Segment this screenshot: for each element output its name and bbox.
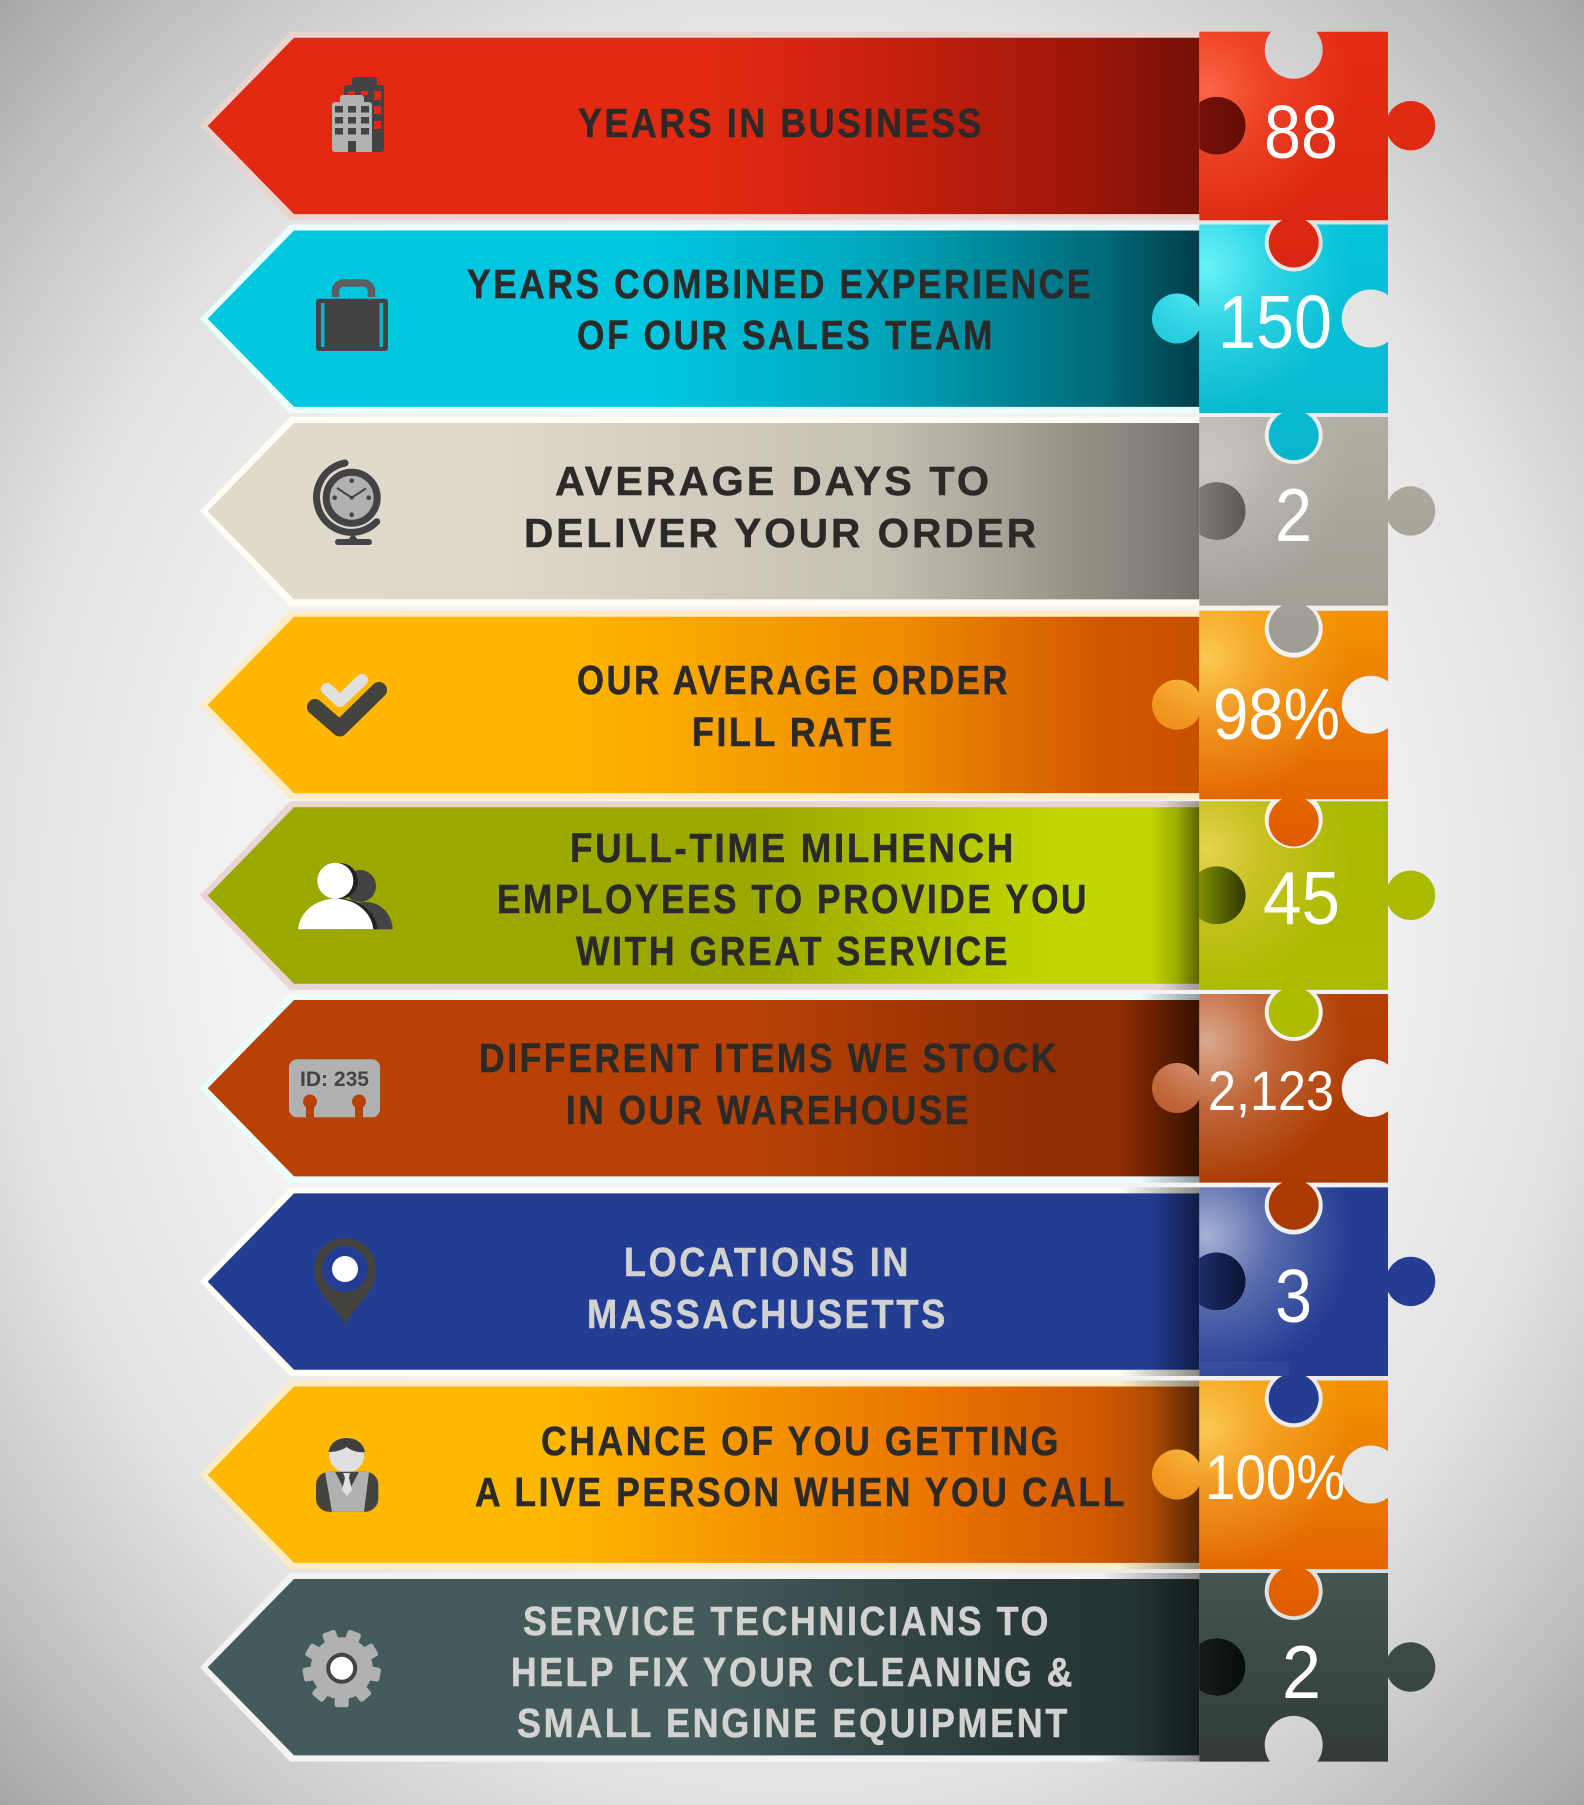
ribbon: rust — [200, 994, 1199, 1183]
label: AVERAGE DAYS TO — [555, 458, 992, 504]
panel: locations — [200, 1187, 1435, 1423]
puzzle piece: orange — [1152, 1380, 1388, 1616]
label: CHANCE OF YOU GETTING — [541, 1418, 1061, 1464]
label: OUR AVERAGE ORDER — [577, 657, 1010, 703]
icon: check marks — [315, 680, 379, 728]
puzzle piece: orange — [1152, 611, 1388, 846]
ribbon: amber — [200, 611, 1199, 799]
ribbon: slate — [200, 1573, 1199, 1762]
label — [587, 1239, 948, 1337]
puzzle piece: red — [1199, 32, 1435, 267]
number: 2 — [1282, 1630, 1321, 1714]
icon: office buildings — [332, 77, 384, 152]
label: YEARS COMBINED EXPERIENCE — [467, 261, 1093, 307]
panel: years in business — [200, 32, 1435, 267]
ribbon: cyan — [200, 224, 1199, 413]
icon: people — [298, 863, 393, 929]
label: FULL-TIME MILHENCH — [570, 825, 1016, 871]
icon: map pin — [314, 1238, 376, 1325]
panel: combined experience — [200, 224, 1388, 460]
icon: id tag: ID: 235 — [300, 1068, 369, 1091]
number: 2 — [1275, 473, 1312, 557]
puzzle piece: cyan — [1152, 224, 1388, 460]
label — [497, 825, 1089, 974]
puzzle piece: grey — [1199, 417, 1435, 653]
label: YEARS IN BUSINESS — [578, 100, 984, 146]
label: WITH GREAT SERVICE — [576, 928, 1010, 974]
number: 88 — [1264, 90, 1338, 174]
label — [475, 1418, 1127, 1515]
label — [467, 261, 1093, 358]
number: 100% — [1205, 1443, 1345, 1513]
ribbon: red — [200, 32, 1199, 220]
label: HELP FIX YOUR CLEANING & — [511, 1649, 1075, 1695]
puzzle piece: rust — [1152, 994, 1388, 1230]
label: DIFFERENT ITEMS WE STOCK — [479, 1035, 1059, 1081]
label: SERVICE TECHNICIANS TO — [523, 1598, 1051, 1644]
icon: globe clock — [317, 463, 377, 545]
label — [479, 1035, 1059, 1133]
icon: gear — [302, 1629, 381, 1707]
panel: full-time employees — [200, 801, 1435, 1037]
label: DELIVER YOUR ORDER — [524, 510, 1039, 556]
label: EMPLOYEES TO PROVIDE YOU — [497, 876, 1089, 922]
number: 98% — [1213, 675, 1340, 755]
label: LOCATIONS IN — [624, 1239, 911, 1285]
number: 150 — [1218, 280, 1332, 364]
label: SMALL ENGINE EQUIPMENT — [517, 1700, 1070, 1746]
ribbon: beige — [200, 417, 1199, 606]
icon: briefcase — [316, 283, 388, 351]
ribbon: olive — [200, 801, 1199, 990]
panel: order fill rate — [200, 611, 1388, 846]
label — [511, 1598, 1075, 1746]
number: 45 — [1263, 856, 1340, 940]
puzzle piece: green — [1199, 801, 1435, 1037]
label: OF OUR SALES TEAM — [577, 312, 995, 358]
label: FILL RATE — [692, 709, 895, 755]
panel: days to deliver — [200, 417, 1435, 653]
number: 2,123 — [1208, 1059, 1334, 1122]
label — [577, 657, 1010, 755]
ribbon: amber — [200, 1380, 1199, 1569]
icon: id tag — [289, 1059, 380, 1117]
ribbon: blue — [200, 1187, 1199, 1376]
panel: service technicians — [200, 1573, 1435, 1762]
puzzle piece: blue — [1199, 1187, 1435, 1423]
number: 3 — [1275, 1254, 1312, 1338]
panel: items in stock — [200, 994, 1388, 1230]
panel: live person — [200, 1380, 1388, 1616]
label: MASSACHUSETTS — [587, 1291, 948, 1337]
icon: person in suit — [316, 1438, 378, 1512]
label: IN OUR WAREHOUSE — [566, 1087, 971, 1133]
puzzle piece: slate — [1199, 1573, 1435, 1762]
label — [524, 458, 1039, 556]
label: A LIVE PERSON WHEN YOU CALL — [475, 1469, 1127, 1515]
